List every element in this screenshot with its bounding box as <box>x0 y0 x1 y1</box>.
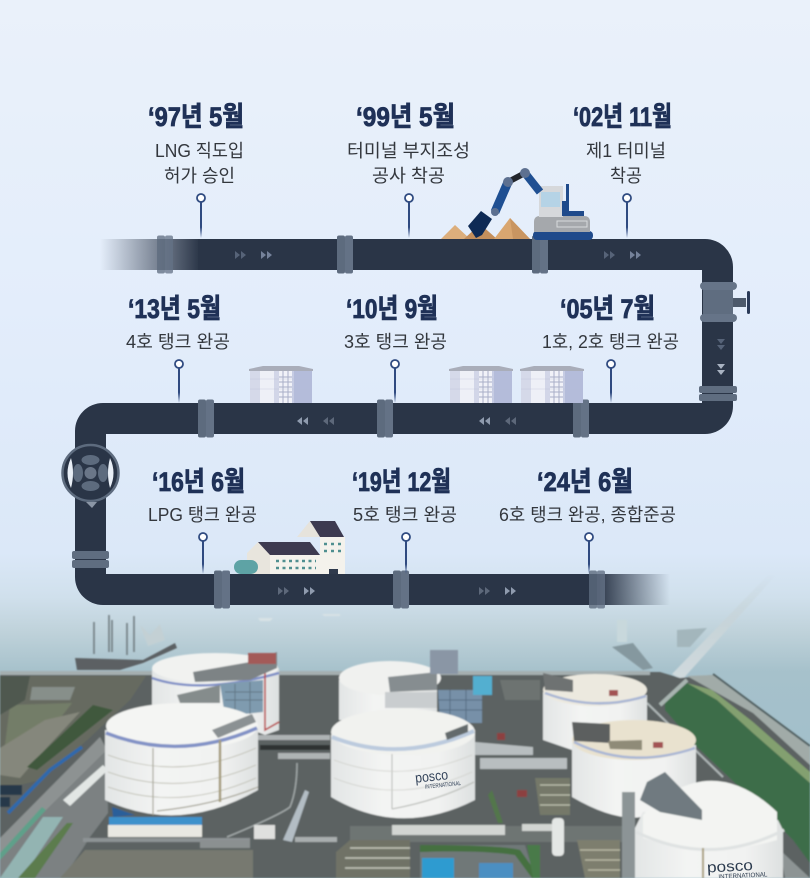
tank D <box>331 709 475 818</box>
description: 3호 탱크 완공 <box>344 332 447 352</box>
date: ‘24년 6월 <box>537 467 633 497</box>
pin <box>197 194 205 238</box>
description: 제1 터미널 <box>586 141 666 161</box>
pin <box>585 533 593 574</box>
icon: LPG plant building <box>234 521 345 574</box>
description: 4호 탱크 완공 <box>126 332 230 352</box>
tank A <box>152 652 279 735</box>
joints on bottom row <box>214 570 605 608</box>
pin <box>402 533 410 574</box>
pipe: main run <box>75 239 733 605</box>
icon: tank 3 <box>449 366 513 403</box>
description line two: 공사 착공 <box>372 166 445 186</box>
center ground features <box>200 735 640 878</box>
left road <box>0 737 107 856</box>
aerial photo of LNG terminal <box>0 573 810 878</box>
description line two: 착공 <box>610 166 642 186</box>
flow arrows right <box>717 339 725 375</box>
milestone: 2019 <box>352 467 457 574</box>
date: ‘10년 9월 <box>346 294 438 324</box>
icon: excavator <box>468 168 593 240</box>
description: 1호, 2호 탱크 완공 <box>542 332 679 352</box>
pin <box>199 533 207 574</box>
milestone: 2002 <box>573 102 672 238</box>
joints on middle row <box>198 400 589 438</box>
sea wall <box>0 671 650 675</box>
milestone: 2024 <box>499 467 676 574</box>
pipe: fade-out at right <box>598 574 670 605</box>
buildings and silo <box>108 676 564 878</box>
tank G <box>622 772 784 878</box>
description: 터미널 부지조성 <box>347 141 470 161</box>
milestone: 1997 <box>148 102 244 238</box>
icon: tank 1 and 2 <box>520 366 584 403</box>
date: ‘19년 12월 <box>352 467 451 497</box>
photo logo: center tank: posco <box>414 766 449 786</box>
right gate valve <box>700 282 750 322</box>
date: ‘13년 5월 <box>128 294 221 324</box>
milestone: 1999 <box>347 102 470 238</box>
pipe clutter <box>260 680 620 878</box>
flow arrows top <box>235 251 641 259</box>
flow arrows bottom <box>278 587 516 595</box>
pin <box>607 360 615 403</box>
icon: tank 4 <box>249 366 313 403</box>
pier <box>612 573 776 680</box>
date: ‘16년 6월 <box>152 467 245 497</box>
description: 5호 탱크 완공 <box>353 505 457 525</box>
date: ‘05년 7월 <box>560 294 655 324</box>
land <box>0 672 810 878</box>
milestone: 2016 <box>148 467 257 574</box>
description: 6호 탱크 완공, 종합준공 <box>499 505 676 525</box>
tank C <box>339 650 482 723</box>
pin <box>405 194 413 238</box>
pipeline <box>62 236 750 608</box>
photo logo: center tank <box>414 765 462 792</box>
milestone: 2013 <box>126 294 230 403</box>
pin <box>391 360 399 403</box>
ships <box>75 614 340 670</box>
pin <box>623 194 631 238</box>
milestone: 2005 <box>542 294 679 403</box>
date: ‘02년 11월 <box>573 102 672 132</box>
flow arrows middle <box>297 417 516 425</box>
round valve wheel <box>62 445 118 508</box>
tank F <box>572 720 696 818</box>
photo logo: front tank: posco <box>707 857 753 876</box>
pipe: fade-in at left <box>100 239 200 270</box>
milestone: 2010 <box>344 294 447 403</box>
bottom-left concrete <box>60 850 253 878</box>
photo logo: front tank <box>707 856 768 878</box>
left yard <box>0 676 146 790</box>
photo logo: center tank: INTERNATIONAL <box>425 781 462 791</box>
date: ‘97년 5월 <box>148 102 244 132</box>
tank B <box>105 703 258 817</box>
left joint <box>72 551 109 568</box>
tank E <box>543 673 647 750</box>
icon: sand piles <box>441 218 530 239</box>
joints on top row <box>157 236 548 274</box>
date: ‘99년 5월 <box>356 102 455 132</box>
right shore and forest <box>687 675 810 765</box>
description line two: 허가 승인 <box>164 166 235 186</box>
description: LPG 탱크 완공 <box>148 505 257 525</box>
pin <box>175 360 183 403</box>
right joint <box>699 386 737 401</box>
description: LNG 직도입 <box>155 141 244 161</box>
